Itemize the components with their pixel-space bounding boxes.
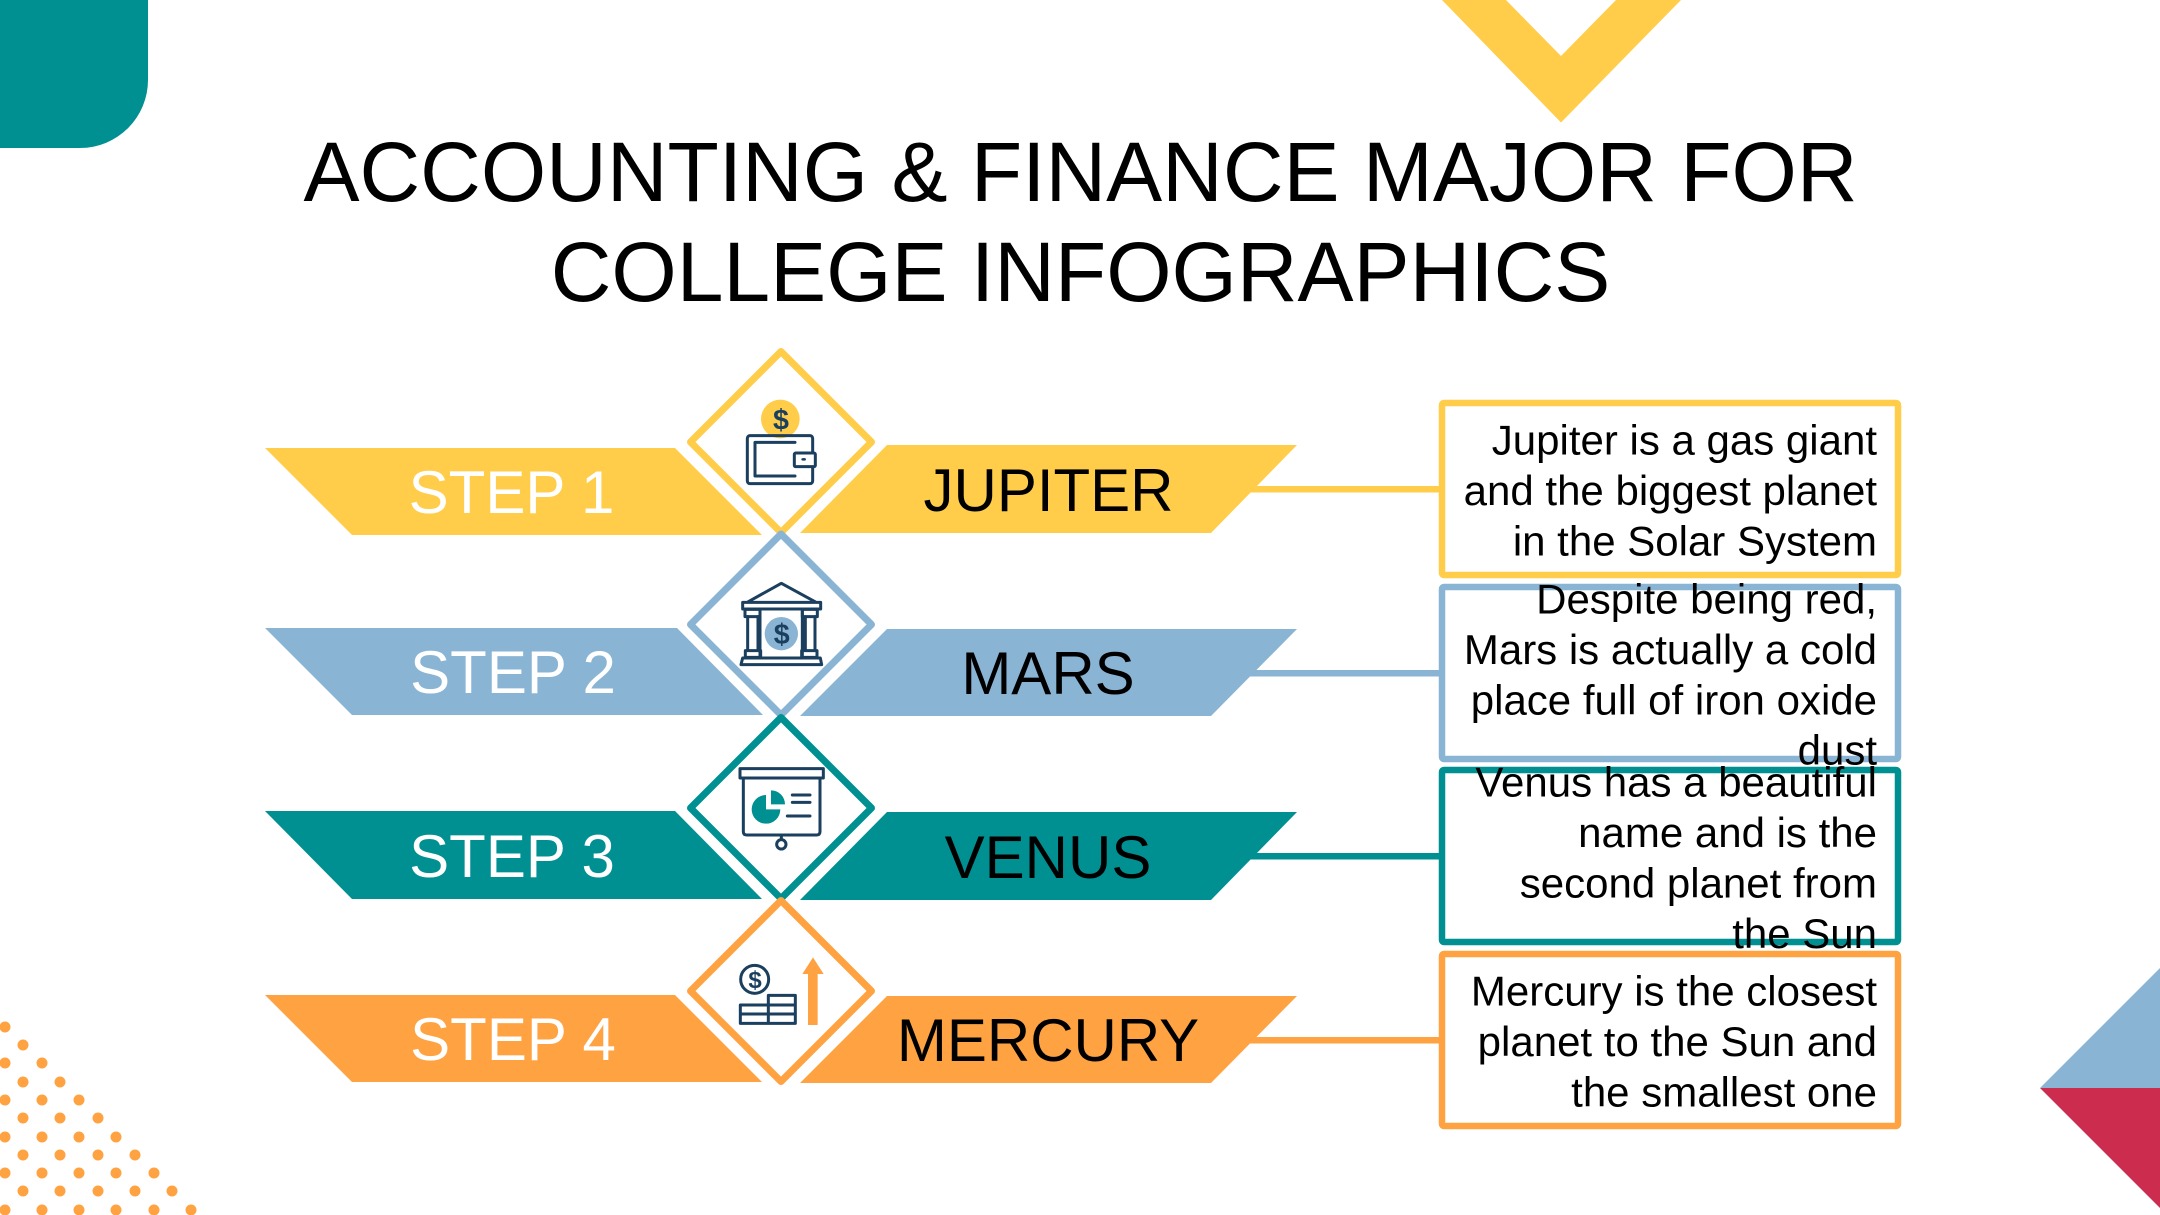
text box: Jupiter bbox=[1442, 403, 1898, 575]
text box: Mars: dust bbox=[1798, 726, 1877, 774]
left band: step 1: STEP 1 bbox=[409, 459, 614, 526]
row: step 2 Mars bbox=[265, 534, 1442, 716]
connector line 1 bbox=[1250, 486, 1442, 492]
right band: Mercury: MERCURY bbox=[897, 1007, 1199, 1074]
decoration: orange dot pattern bbox=[0, 1022, 196, 1215]
icon: wallet with coin bbox=[747, 400, 815, 484]
diamond 3 bbox=[690, 718, 872, 898]
connector line 3 bbox=[1250, 853, 1442, 860]
decoration: teal rounded corner bbox=[0, 0, 148, 148]
left band: step 1 bbox=[265, 448, 762, 535]
row: step 1 Jupiter bbox=[265, 352, 1442, 535]
connector line 2 bbox=[1250, 670, 1442, 676]
icon: bank building bbox=[741, 583, 822, 665]
left band: step 3: STEP 3 bbox=[409, 823, 615, 890]
text box: Mercury: Mercury is the closest bbox=[1471, 968, 1877, 1014]
right band: Jupiter: JUPITER bbox=[923, 457, 1174, 524]
left band: step 4: STEP 4 bbox=[410, 1006, 616, 1073]
text box: Mars bbox=[1442, 576, 1898, 774]
right band: Venus bbox=[800, 812, 1297, 900]
connector line 4 bbox=[1250, 1037, 1442, 1044]
text box: Mercury: the smallest one bbox=[1571, 1068, 1877, 1116]
icon: presentation board with pie chart bbox=[740, 769, 823, 849]
text box: Mars: place full of iron oxide bbox=[1471, 676, 1877, 724]
decoration: yellow chevron bbox=[1442, 0, 1681, 122]
diamond 2 bbox=[690, 534, 872, 715]
decoration: blue triangle bbox=[2040, 968, 2160, 1088]
title: COLLEGE INFOGRAPHICS bbox=[551, 225, 1610, 319]
left band: step 2 bbox=[265, 628, 763, 715]
diamond 4 bbox=[690, 900, 872, 1082]
right band: Mars bbox=[800, 629, 1297, 716]
left band: step 4 bbox=[265, 995, 762, 1082]
text box: Mercury bbox=[1442, 954, 1898, 1126]
row: step 3 Venus bbox=[265, 718, 1442, 900]
title bbox=[303, 125, 1858, 319]
icon: coin and cash stack with up arrow: $ bbox=[748, 967, 762, 994]
left band: step 3 bbox=[265, 811, 762, 899]
right band: Mercury bbox=[800, 996, 1297, 1083]
icon: wallet with coin: $ bbox=[773, 404, 789, 436]
text box: Venus bbox=[1442, 758, 1898, 957]
text box: Mars: Despite being red, bbox=[1536, 576, 1877, 622]
text box: Mercury: planet to the Sun and bbox=[1478, 1018, 1877, 1065]
text box: Venus: the Sun bbox=[1732, 910, 1877, 957]
text box: Venus: second planet from bbox=[1520, 860, 1877, 906]
icon: bank building: $ bbox=[774, 619, 790, 651]
decoration: crimson triangle bbox=[2040, 1088, 2160, 1208]
right band: Venus: VENUS bbox=[945, 824, 1151, 891]
row: step 4 Mercury bbox=[265, 900, 1442, 1083]
left band: step 2: STEP 2 bbox=[410, 639, 616, 706]
text box: Mars: Mars is actually a cold bbox=[1464, 626, 1877, 673]
diamond 1 bbox=[690, 352, 872, 532]
text box: Venus: Venus has a beautiful bbox=[1475, 758, 1877, 806]
text box: Jupiter: in the Solar System bbox=[1513, 518, 1877, 564]
icon: coin and cash stack with up arrow bbox=[740, 957, 824, 1025]
text box: Jupiter: Jupiter is a gas giant bbox=[1492, 416, 1877, 464]
right band: Mars: MARS bbox=[961, 640, 1135, 707]
title: ACCOUNTING & FINANCE MAJOR FOR bbox=[303, 125, 1858, 219]
text box: Jupiter: and the biggest planet bbox=[1464, 467, 1877, 514]
right band: Jupiter bbox=[800, 445, 1297, 533]
text box: Venus: name and is the bbox=[1578, 809, 1877, 856]
